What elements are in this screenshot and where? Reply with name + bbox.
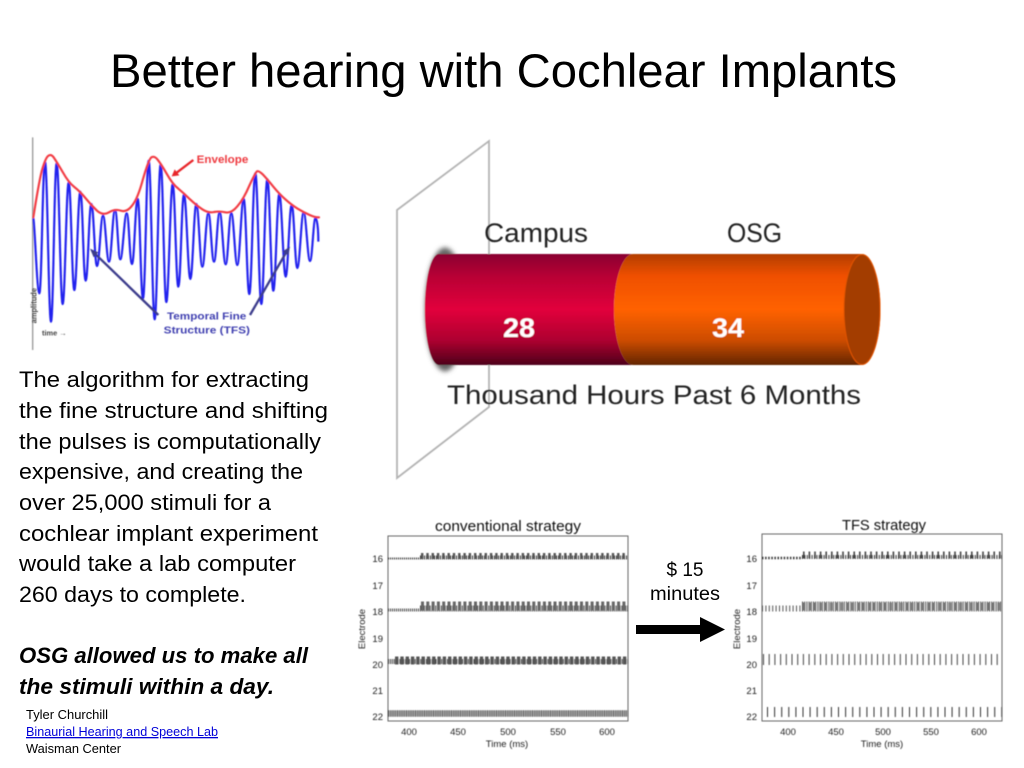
chart title: TFS strategy bbox=[842, 517, 926, 534]
y axis labels: 22 bbox=[372, 712, 383, 723]
x axis labels: 450 bbox=[828, 727, 844, 738]
electrode 18 pulses bbox=[762, 606, 1002, 608]
chart: envelope and temporal fine structure waveform bbox=[29, 137, 319, 350]
x axis title: Time (ms) bbox=[486, 739, 528, 750]
title: Better hearing with Cochlear Implants bbox=[110, 44, 897, 97]
y axis labels: 19 bbox=[372, 634, 383, 645]
author credit: Waisman Center bbox=[26, 741, 122, 756]
body text paragraph: expensive, and creating the bbox=[19, 459, 303, 484]
x axis labels: 450 bbox=[450, 727, 466, 738]
body text paragraph: the fine structure and shifting bbox=[19, 398, 328, 423]
blue fine structure waveform bbox=[33, 161, 318, 322]
x axis labels: 400 bbox=[780, 727, 796, 738]
electrode 20 pulses bbox=[388, 660, 628, 662]
y axis labels bbox=[372, 554, 383, 723]
x axis title: Time (ms) bbox=[861, 739, 903, 750]
y axis labels: 18 bbox=[372, 607, 383, 618]
OSG label: OSG bbox=[727, 218, 782, 248]
envelope label: Envelope bbox=[197, 154, 248, 166]
y axis labels: 22 bbox=[746, 712, 757, 723]
cost and time note bbox=[650, 560, 720, 605]
electrode 16 pulses bbox=[762, 555, 1002, 558]
wall plane bbox=[397, 141, 489, 478]
electrode 18 pulses bbox=[388, 606, 628, 610]
y axis labels: 19 bbox=[746, 634, 757, 645]
red envelope curve bbox=[33, 155, 319, 217]
cost and time note: minutes bbox=[650, 584, 720, 605]
y axis labels: 21 bbox=[372, 686, 383, 697]
envelope pointer arrow bbox=[172, 160, 193, 176]
x axis labels bbox=[780, 727, 987, 738]
cost and time note: $ 15 bbox=[667, 560, 703, 581]
electrode 16 pulses bbox=[388, 556, 628, 558]
electrode 20 pulses bbox=[763, 654, 1002, 665]
emphasis conclusion text: OSG allowed us to make all bbox=[19, 643, 309, 668]
axis caption: Thousand Hours Past 6 Months bbox=[447, 380, 861, 410]
emphasis conclusion text bbox=[19, 643, 309, 699]
x axis labels: 550 bbox=[550, 727, 566, 738]
y axis labels: 17 bbox=[372, 581, 383, 592]
campus segment bbox=[425, 254, 633, 365]
cylinder shadow bbox=[425, 248, 465, 372]
y axis title: Electrode bbox=[732, 609, 743, 649]
time label: time → bbox=[42, 331, 67, 338]
chart title: conventional strategy bbox=[435, 518, 582, 535]
y axis labels bbox=[746, 554, 757, 723]
x axis labels: 600 bbox=[599, 727, 615, 738]
x axis labels: 550 bbox=[923, 727, 939, 738]
TFS label: Temporal Fine bbox=[167, 311, 247, 322]
x axis labels: 600 bbox=[971, 727, 987, 738]
amplitude axis line bbox=[31, 137, 35, 350]
author credit: Binaurial Hearing and Speech Lab bbox=[26, 724, 218, 739]
y axis labels: 20 bbox=[372, 660, 383, 671]
y axis labels: 16 bbox=[746, 554, 757, 565]
author credit bbox=[26, 707, 218, 756]
y axis labels: 17 bbox=[746, 581, 757, 592]
emphasis conclusion text: the stimuli within a day. bbox=[19, 674, 274, 699]
campus label: Campus bbox=[484, 218, 588, 248]
chart: TFS strategy pulses bbox=[732, 517, 1002, 750]
cylinder end cap bbox=[844, 254, 880, 364]
body text paragraph: 260 days to complete. bbox=[19, 582, 246, 607]
electrode 22 pulses bbox=[767, 707, 1002, 717]
body text paragraph: would take a lab computer bbox=[18, 551, 296, 576]
body text paragraph: The algorithm for extracting bbox=[19, 367, 309, 392]
x axis labels: 500 bbox=[875, 727, 891, 738]
y axis labels: 16 bbox=[372, 554, 383, 565]
y axis labels: 20 bbox=[746, 660, 757, 671]
y axis labels: 18 bbox=[746, 607, 757, 618]
campus value: 28 bbox=[503, 313, 535, 343]
amplitude label: amplitude bbox=[29, 287, 38, 323]
body text paragraph bbox=[18, 367, 328, 607]
body text paragraph: the pulses is computationally bbox=[19, 429, 321, 454]
body text paragraph: cochlear implant experiment bbox=[19, 521, 318, 546]
electrode 22 pulses bbox=[388, 710, 628, 717]
TFS label bbox=[164, 311, 250, 337]
arrow between charts bbox=[636, 617, 725, 642]
y axis title: Electrode bbox=[357, 609, 368, 649]
x axis labels bbox=[401, 727, 615, 738]
x axis labels: 400 bbox=[401, 727, 417, 738]
body text paragraph: over 25,000 stimuli for a bbox=[19, 490, 272, 515]
TFS label: Structure (TFS) bbox=[164, 326, 250, 337]
OSG value: 34 bbox=[712, 313, 744, 343]
chart: conventional strategy pulses bbox=[357, 518, 628, 750]
OSG segment bbox=[614, 254, 881, 365]
chart: 3D cylinder of compute hours bbox=[397, 141, 881, 478]
plot frame bbox=[388, 536, 628, 721]
x axis labels: 500 bbox=[500, 727, 516, 738]
TFS pointer arrows bbox=[90, 247, 290, 315]
y axis labels: 21 bbox=[746, 686, 757, 697]
plot frame bbox=[762, 534, 1002, 721]
author credit: Tyler Churchill bbox=[26, 707, 108, 722]
